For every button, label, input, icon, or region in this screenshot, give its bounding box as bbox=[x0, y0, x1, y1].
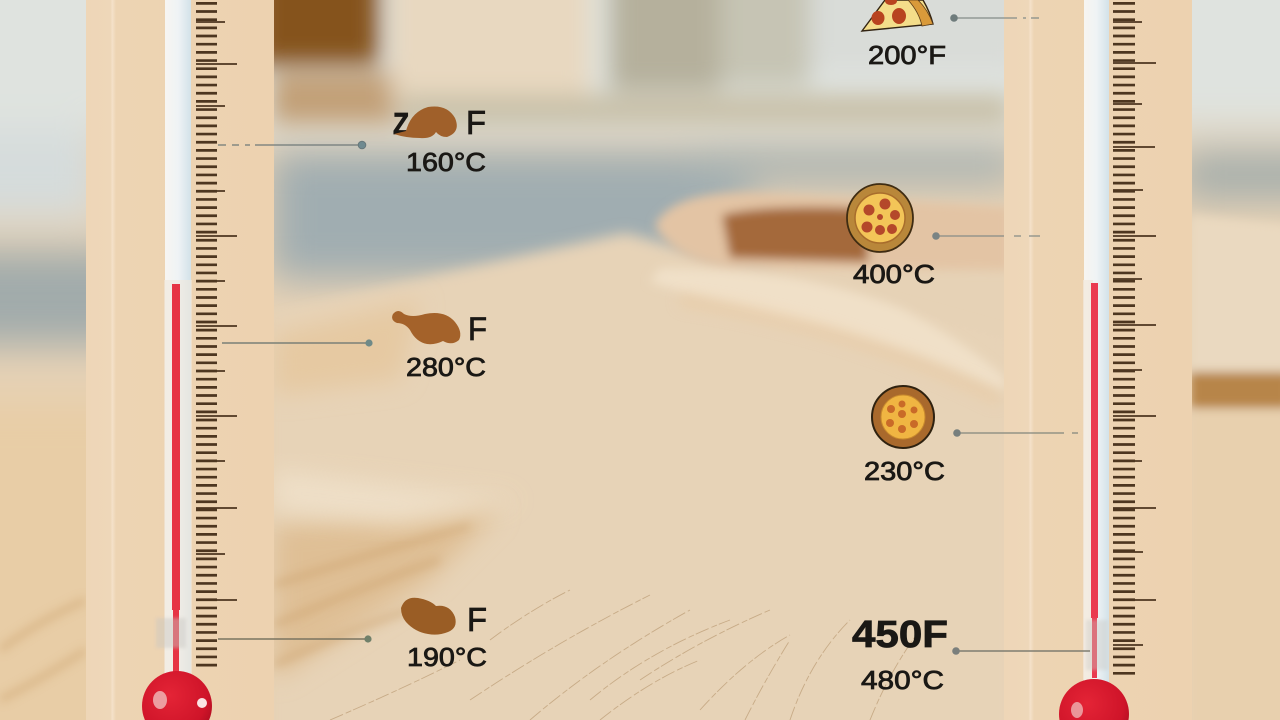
right wooden board bbox=[1004, 0, 1192, 720]
icon: whole pizza bbox=[872, 386, 934, 448]
temperature label C: 480°C bbox=[861, 665, 944, 695]
callout: 450F / 480°C bbox=[852, 614, 1090, 695]
right glass collar bbox=[1086, 620, 1108, 670]
left glass tube bbox=[165, 0, 191, 690]
wood grain bbox=[274, 510, 500, 680]
icon: chicken bbox=[401, 598, 456, 635]
right scale ticks bbox=[1113, 2, 1156, 678]
right red bulb bbox=[1059, 679, 1129, 720]
callout: pizza 400°C bbox=[847, 184, 1040, 289]
connector line bbox=[218, 635, 372, 643]
callout: pizza 230°C bbox=[864, 386, 1078, 486]
temperature label: 200°F bbox=[868, 40, 946, 70]
temperature label: 230°C bbox=[864, 456, 945, 486]
callout: chicken 280°C bbox=[222, 311, 487, 382]
temperature label C: 280°C bbox=[406, 352, 486, 382]
left scale ticks bbox=[196, 2, 237, 672]
temperature label F: F bbox=[466, 104, 486, 141]
temperature label F: F bbox=[468, 311, 487, 347]
connector line bbox=[218, 141, 366, 149]
temperature label C: 160°C bbox=[406, 147, 486, 177]
icon: whole pizza bbox=[847, 184, 913, 252]
left glass collar bbox=[156, 618, 186, 648]
left red column bbox=[172, 284, 180, 672]
temperature label C: 190°C bbox=[407, 642, 487, 672]
connector line bbox=[953, 429, 1078, 437]
temperature label: 400°C bbox=[853, 259, 935, 289]
left wooden board bbox=[86, 0, 274, 720]
connector line bbox=[952, 647, 1090, 655]
right thermometer bbox=[1004, 0, 1192, 720]
icon: chicken bbox=[392, 311, 460, 344]
callout: chicken 190°C bbox=[218, 598, 487, 672]
icon: chicken bbox=[394, 106, 457, 138]
connector line bbox=[222, 339, 373, 347]
blurred wooden bowl bbox=[650, 192, 1280, 720]
right red column bbox=[1091, 283, 1098, 678]
temperature label Z: Z bbox=[393, 106, 409, 141]
connector line bbox=[950, 14, 1039, 22]
table surface bbox=[274, 233, 1010, 720]
right glass tube bbox=[1084, 0, 1109, 690]
callout: chicken 160°C bbox=[218, 104, 486, 177]
temperature label F: 450F bbox=[852, 614, 948, 656]
temperature label F: F bbox=[467, 601, 487, 638]
left thermometer bbox=[86, 0, 274, 720]
callout: pizza slice 200°F bbox=[862, 0, 1039, 70]
icon: pizza slice bbox=[862, 0, 933, 31]
left red bulb bbox=[142, 671, 212, 720]
connector line bbox=[932, 232, 1040, 240]
